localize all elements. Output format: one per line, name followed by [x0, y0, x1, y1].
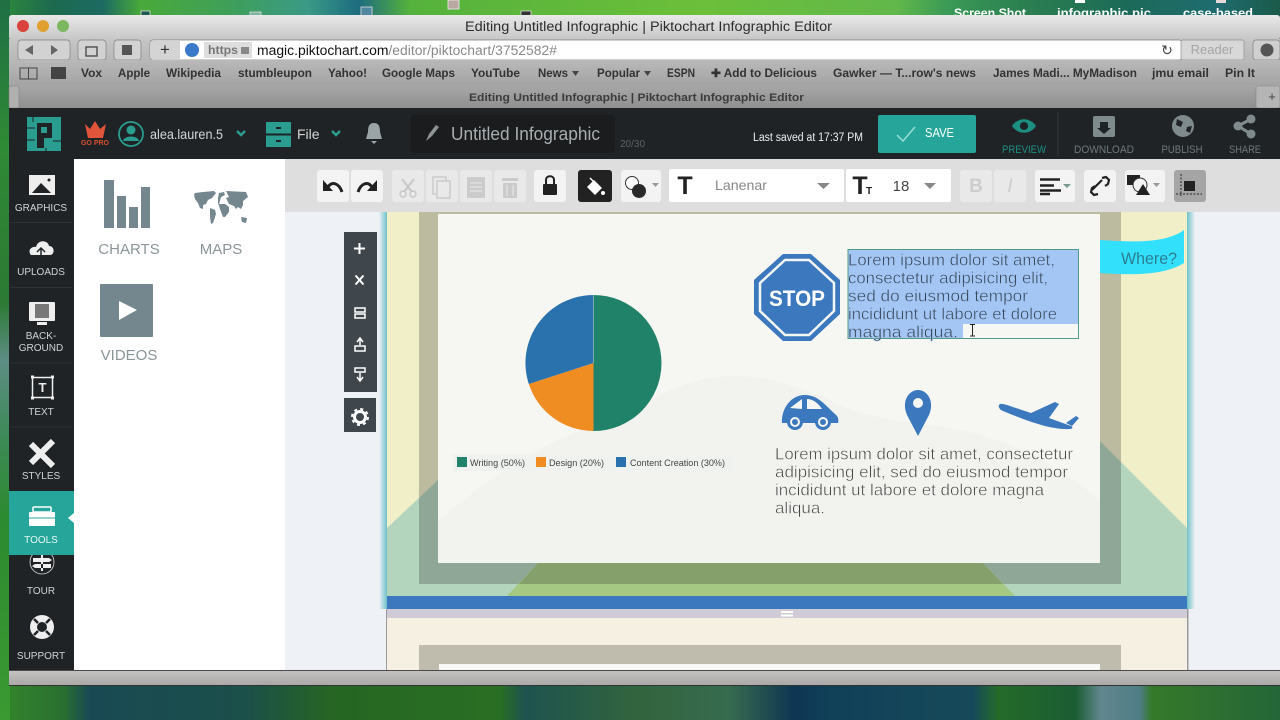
ribbon: where: Where?: [1121, 249, 1177, 268]
publish: PUBLISH: [1162, 144, 1203, 156]
pie chart: [525, 295, 662, 431]
bookmarks bar: ✚ Add to Delicious: [711, 68, 817, 80]
background item: [19, 302, 63, 354]
desktop icons and labels: case-based: [1183, 6, 1253, 20]
bookmarks bar: James Madi... MyMadison: [993, 68, 1137, 80]
section handle: [387, 609, 1187, 618]
font size picker: 18: [893, 178, 909, 195]
graphics item: GRAPHICS: [15, 203, 67, 214]
character count: 20/30: [620, 139, 645, 150]
selected text block: magna aliqua.: [848, 322, 958, 342]
uploads item: [17, 241, 65, 278]
preview: [1002, 119, 1047, 156]
white card: [438, 214, 1100, 563]
browser status bar: [9, 670, 1280, 686]
icon: remove: [356, 276, 364, 284]
ribbon: where: [1100, 230, 1184, 274]
desktop icons and labels: infographic pic: [1057, 6, 1151, 20]
bold button: B: [969, 176, 983, 197]
icon: stop sign: STOP: [769, 286, 825, 311]
logo: [27, 117, 61, 151]
download: [1074, 116, 1134, 156]
share: [1229, 114, 1261, 156]
selected text block: incididunt ut labore et dolore: [848, 304, 1057, 324]
support item: [17, 615, 65, 662]
section background: [387, 212, 1187, 528]
selected text block: sed do eiusmod tempor: [848, 286, 1028, 306]
bookmarks bar: Popular: [597, 68, 641, 80]
undo button: [317, 170, 349, 202]
body text: aliqua.: [775, 498, 825, 518]
trash button: [494, 170, 526, 202]
cut button: [392, 170, 424, 202]
address toolbar: Reader: [1191, 42, 1234, 57]
address toolbar: +: [160, 40, 170, 59]
bookmarks bar: jmu email: [1151, 68, 1209, 80]
italic button: I: [1007, 176, 1013, 197]
publish: [1162, 115, 1203, 156]
bookmarks bar: stumbleupon: [238, 68, 312, 80]
preview: PREVIEW: [1002, 144, 1047, 156]
tools item active: TOOLS: [24, 535, 58, 546]
bookmarks bar: [9, 60, 1280, 85]
text item: TEXT: [28, 407, 54, 418]
green trapezoid: [507, 563, 1015, 596]
browser chrome: [9, 15, 1280, 108]
user account: [119, 122, 245, 146]
tools item active: [9, 491, 74, 555]
floating element toolbar: [344, 232, 377, 392]
tab bar: [9, 85, 1280, 108]
bookmarks bar: Vox: [81, 68, 103, 80]
next section: [387, 618, 1187, 670]
align button: [1035, 170, 1075, 202]
text item: [28, 377, 54, 418]
tour item: TOUR: [27, 586, 55, 597]
icon: section layout: [355, 308, 365, 318]
tab bar: Editing Untitled Infographic | Piktochart Infographic Editor: [469, 92, 805, 104]
videos tool: VIDEOS: [101, 347, 157, 364]
icon: airplane: [999, 402, 1079, 429]
position button: [1174, 170, 1206, 202]
arrange button: [1125, 170, 1165, 202]
selected text block: consectetur adipisicing elit,: [848, 268, 1048, 288]
opacity button: [621, 170, 661, 202]
frame over mountain: [419, 441, 1121, 584]
bookmarks bar: YouTube: [471, 68, 520, 80]
icon: add: [354, 243, 365, 254]
videos tool: [100, 284, 157, 364]
chart legend: Design (20%): [549, 458, 604, 468]
styles item: [22, 441, 60, 482]
document title: Untitled Infographic: [451, 124, 600, 144]
maps tool: [194, 191, 248, 258]
bookmarks bar: Google Maps: [382, 68, 455, 80]
last saved: Last saved at 17:37 PM: [753, 132, 863, 144]
bookmarks bar: Wikipedia: [166, 68, 222, 80]
font picker: [669, 169, 844, 202]
tools panel: [74, 159, 285, 670]
download: DOWNLOAD: [1074, 144, 1134, 156]
app header: [9, 108, 1280, 159]
paste button: [460, 170, 492, 202]
link button: [1084, 170, 1116, 202]
font size picker: T: [852, 172, 868, 200]
background item: GROUND: [19, 343, 63, 354]
address toolbar: https: [208, 43, 238, 57]
left sidebar: [9, 159, 74, 670]
copy button: [426, 170, 458, 202]
text item: T: [39, 380, 47, 395]
save button: [878, 115, 976, 153]
icon: move down: [355, 368, 365, 381]
background item: BACK-: [26, 331, 56, 342]
bookmarks bar: ESPN: [667, 68, 695, 80]
title bar: Editing Untitled Infographic | Piktochart Infographic Editor: [465, 19, 833, 34]
icon: move up: [355, 338, 365, 351]
address toolbar: ↻: [1161, 42, 1173, 58]
fill colour button: [578, 170, 612, 202]
title bar: [9, 15, 1280, 40]
icon: car: [782, 395, 838, 430]
body text: incididunt ut labore et dolore magna: [775, 480, 1045, 500]
graphics item: [15, 175, 67, 214]
bookmarks bar: Gawker — T...row's news: [833, 68, 976, 80]
go pro crown: [81, 121, 110, 147]
go pro crown: GO PRO: [81, 140, 110, 147]
address toolbar: magic.piktochart.com /editor/piktochart/3752582#: [257, 43, 557, 58]
formatting toolbar: [285, 159, 1280, 212]
user account: alea.lauren.5: [150, 126, 223, 142]
styles item: STYLES: [22, 471, 60, 482]
font size picker: T: [866, 186, 872, 197]
chart legend: Content Creation (30%): [630, 458, 725, 468]
chart legend: [457, 457, 724, 468]
body text: [775, 444, 1073, 518]
support item: SUPPORT: [17, 651, 65, 662]
mint mountain: [387, 462, 1187, 596]
body text: adipisicing elit, sed do eiusmod tempor: [775, 462, 1068, 482]
icon: bell: [366, 123, 382, 144]
redo button: [351, 170, 383, 202]
infographic page: [387, 212, 1187, 670]
bookmarks bar: Pin It: [1225, 68, 1255, 80]
share: SHARE: [1229, 144, 1261, 156]
bookmarks bar: Apple: [118, 68, 150, 80]
bold button: [960, 170, 992, 202]
olive frame: [419, 212, 1121, 498]
tab bar: +: [1268, 89, 1276, 104]
address toolbar: [9, 39, 1280, 60]
bookmarks bar: Yahoo!: [328, 68, 367, 80]
bookmarks bar: News: [538, 68, 568, 80]
tour item: [27, 550, 55, 597]
icon: stop sign: [754, 254, 840, 341]
document title: [411, 115, 615, 153]
font picker: Lanenar: [715, 177, 767, 193]
maps tool: MAPS: [200, 241, 242, 258]
icon: text cursor: [970, 324, 975, 336]
page edge glow: [379, 212, 1195, 670]
selected text block: [848, 250, 1078, 342]
file menu: File: [297, 126, 320, 142]
file menu: [266, 122, 340, 147]
selected text block: Lorem ipsum dolor sit amet,: [848, 250, 1055, 270]
italic button: [994, 170, 1026, 202]
icon: map pin: [905, 390, 931, 436]
body text: Lorem ipsum dolor sit amet, consectetur: [775, 444, 1073, 464]
chart legend: Writing (50%): [470, 458, 525, 468]
blue band: [387, 596, 1187, 609]
settings button: [344, 398, 376, 432]
charts tool: [98, 180, 160, 258]
desktop icons and labels: [141, 0, 1253, 20]
uploads item: UPLOADS: [17, 267, 65, 278]
desktop icons and labels: Screen Shot: [954, 6, 1026, 20]
font size picker: [846, 169, 951, 202]
save button: SAVE: [925, 126, 954, 140]
charts tool: CHARTS: [98, 241, 160, 258]
font picker: T: [677, 172, 693, 200]
lock button: [534, 170, 566, 202]
canvas background: [285, 212, 1280, 670]
